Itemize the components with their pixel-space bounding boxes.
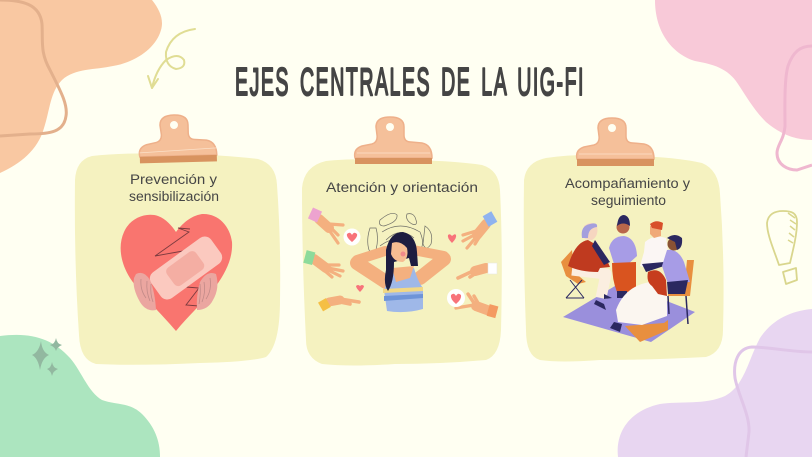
panel: acompañamiento y seguimiento: [524, 118, 724, 362]
card 1 heading: sensibilización: [129, 189, 219, 204]
person 5: [610, 270, 668, 342]
panel: atención y orientación: [302, 117, 502, 366]
panel: prevención y sensibilización: [75, 114, 280, 365]
heart bubble left: [344, 228, 360, 246]
woman face: [391, 242, 408, 262]
pink corner blob: [655, 0, 812, 140]
heart right: [448, 234, 456, 243]
person 4: [662, 235, 690, 294]
card 1 heading: [129, 172, 219, 204]
purple squiggle line: [735, 347, 812, 457]
hand top right: [463, 211, 497, 248]
sparkles icon: [32, 338, 62, 376]
hand bottom left: [318, 298, 359, 311]
clip 3: [577, 118, 654, 166]
heart bubble right: [447, 289, 465, 307]
card background 2: [302, 159, 502, 366]
card 3 heading: seguimiento: [591, 193, 666, 208]
card 1 heading: Prevención y: [130, 172, 217, 187]
peach corner blob: [0, 0, 162, 173]
hand mid left: [303, 250, 343, 277]
pink squiggle line: [777, 46, 812, 170]
heart lower left: [356, 285, 364, 292]
card 3 heading: Acompañamiento y: [565, 176, 690, 191]
right chair: [668, 260, 694, 296]
person 1: [568, 223, 612, 310]
green corner blob: [0, 335, 160, 457]
woman hair: [385, 232, 418, 291]
purple corner blob: [618, 309, 812, 457]
exclamation doodle: [767, 211, 797, 284]
arrow doodle: [148, 29, 195, 88]
clip 1: [138, 114, 217, 163]
card 3 heading: [565, 176, 690, 208]
woman arms: [357, 250, 444, 282]
card background 3: [524, 155, 724, 362]
thought scribbles: [368, 213, 432, 252]
illustration: woman surrounded by helping hands: [303, 207, 498, 318]
left chair: [561, 250, 586, 284]
card background 1: [75, 153, 280, 365]
woman top: [384, 268, 423, 312]
person 3: [640, 221, 668, 272]
hand top left: [308, 207, 343, 243]
peach squiggle line: [0, 0, 66, 136]
icon: bandaged heart: [121, 214, 232, 331]
illustration: support group circle: [561, 215, 695, 342]
person 2: [609, 215, 637, 298]
hand bottom right: [456, 294, 498, 318]
clip 2: [355, 117, 432, 164]
hand mid right: [458, 263, 497, 278]
card 2 heading: Atención y orientación: [326, 180, 478, 195]
rug: [563, 283, 695, 342]
